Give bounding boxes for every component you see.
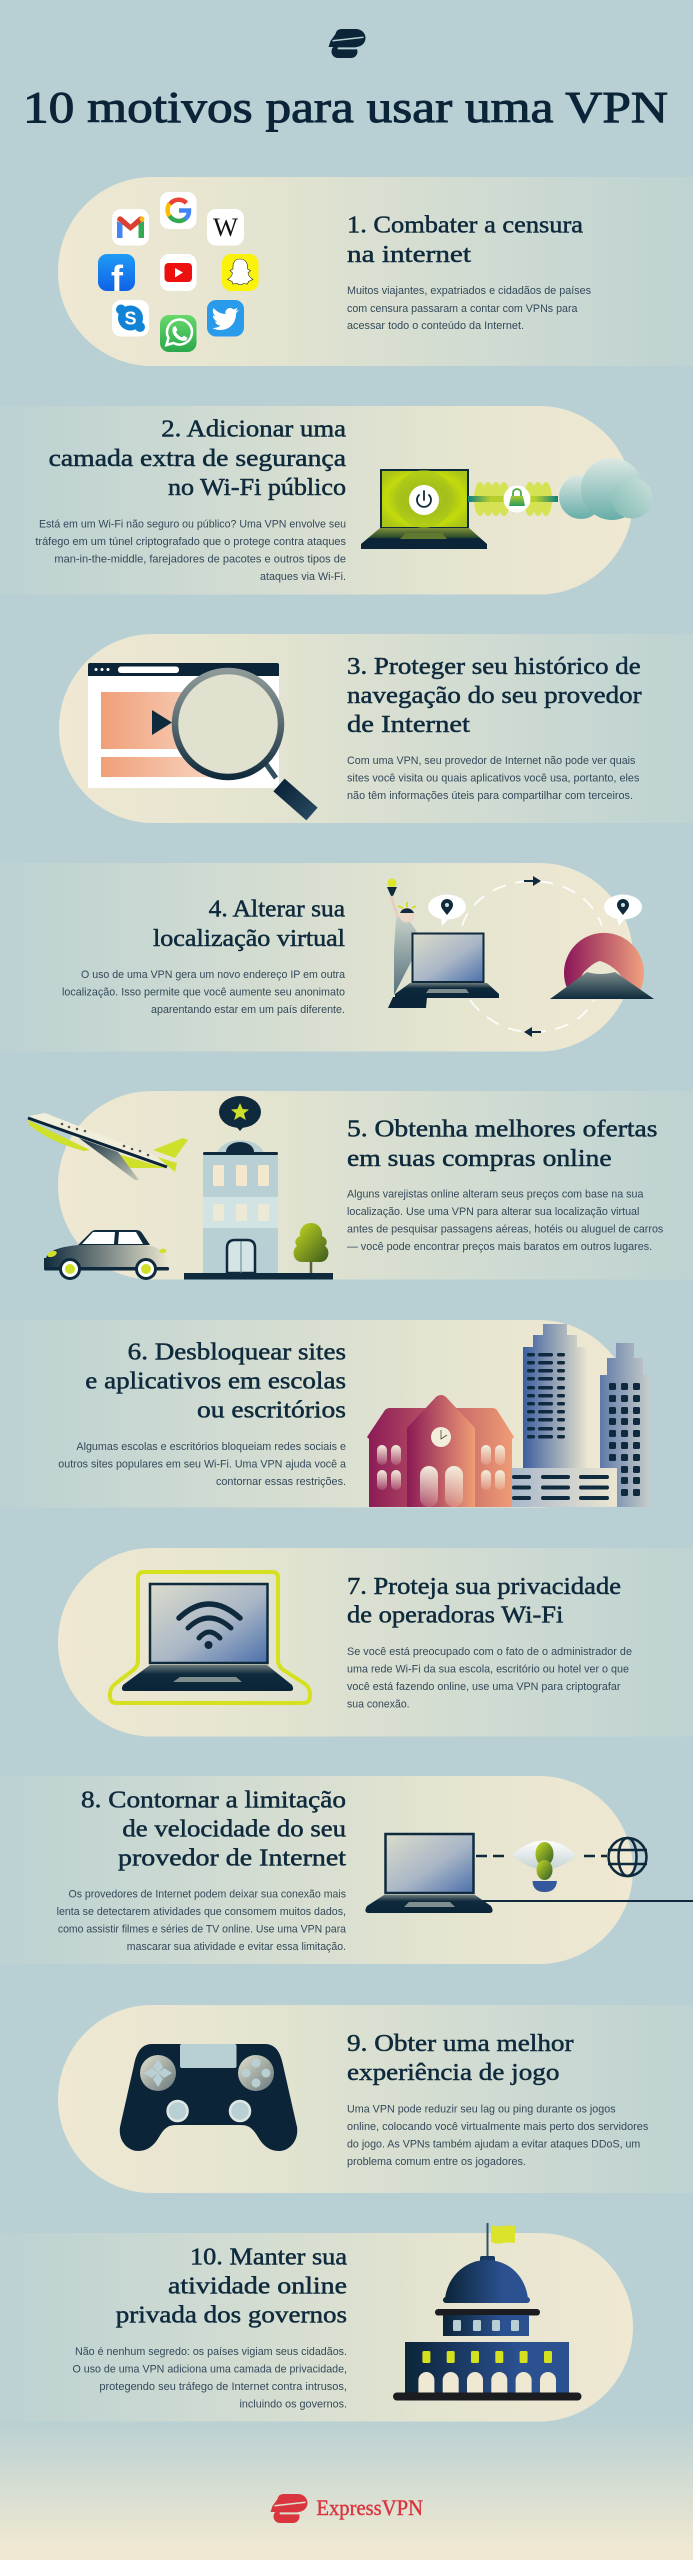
body text 7: você está fazendo online, use uma VPN para criptografar [347, 1681, 621, 1693]
body text 3: não têm informações úteis para compartilhar com terceiros. [347, 790, 633, 802]
body text 5 [347, 1189, 664, 1253]
footer logo [270, 2494, 423, 2523]
body text 10 [72, 2346, 347, 2410]
heading 3 [347, 654, 642, 738]
tunnel and lock [468, 482, 558, 516]
title: 10 motivos para usar uma VPN [23, 83, 668, 132]
wordmark: ExpressVPN [316, 2495, 423, 2520]
icon: Google [160, 192, 196, 229]
body text 6: outros sites populares em seu Wi-Fi. Uma VPN ajuda você a [58, 1458, 347, 1470]
heading 2: 2. Adicionar uma [161, 417, 346, 443]
body text 6 [58, 1441, 347, 1488]
body text 1: acessar todo o conteúdo da Internet. [347, 320, 524, 332]
heading 10: privada dos governos [116, 2303, 347, 2329]
body text 10: incluindo os governos. [240, 2398, 347, 2410]
body text 5: Alguns varejistas online alteram seus preços com base na sua [347, 1189, 644, 1201]
tower middle [523, 1324, 587, 1468]
heading 8: provedor de Internet [118, 1846, 346, 1872]
icon: Facebook: f [111, 258, 124, 299]
heading 1: na internet [347, 242, 471, 268]
body text 3: sites você visita ou quais aplicativos você usa, portanto, eles [347, 772, 640, 784]
panel 6: schools and offices [0, 1320, 649, 1508]
body text 9 [347, 2103, 649, 2168]
icon: YouTube [160, 254, 196, 291]
laptop [361, 470, 487, 549]
statue of liberty [387, 878, 427, 1008]
illustration: laptop with Wi-Fi symbol [110, 1572, 310, 1703]
low office block [512, 1468, 617, 1507]
school [367, 1395, 514, 1507]
tree [294, 1223, 328, 1273]
body text 2: ataques via Wi-Fi. [260, 571, 346, 583]
magnifier [175, 671, 312, 814]
plane [28, 1113, 188, 1180]
body text 8: como assistir filmes e séries de TV online. Use uma VPN para [58, 1924, 347, 1936]
body text 8: mascarar sua atividade e evitar essa limitação. [127, 1941, 346, 1953]
heading 8 [81, 1787, 346, 1872]
panel 2: public Wi-Fi [0, 406, 652, 594]
dome [443, 2256, 530, 2303]
heading 5 [347, 1117, 658, 1172]
body text 7: Se você está preocupado com o fato de o administrador de [347, 1646, 632, 1658]
heading 2: no Wi-Fi público [168, 475, 346, 501]
panel 10: governments [0, 2223, 633, 2422]
body text 2: Está em um Wi-Fi não seguro ou público? Uma VPN envolve seu [39, 519, 346, 531]
heading 6: e aplicativos em escolas [85, 1369, 346, 1395]
browser window [88, 663, 279, 788]
icon: Twitter [207, 300, 244, 336]
body text 5: — você pode encontrar preços mais baratos em outros lugares. [347, 1241, 652, 1253]
laptop [395, 934, 499, 998]
star bubble [219, 1096, 261, 1131]
car [44, 1230, 169, 1278]
heading 10: 10. Manter sua [190, 2244, 347, 2270]
Wi-Fi symbol [179, 1604, 240, 1647]
heading 1 [347, 213, 583, 268]
cable line [482, 1900, 693, 1902]
heading 6: ou escritórios [197, 1398, 346, 1424]
dashes [476, 1855, 607, 1857]
body text 9: online, colocando você virtualmente mais perto dos servidores [347, 2121, 649, 2133]
laptop [365, 1834, 493, 1913]
body text 4: aparentando estar em um país diferente. [151, 1004, 345, 1016]
globe [608, 1838, 647, 1876]
heading 6: 6. Desbloquear sites [128, 1339, 346, 1365]
body text 5: localização. Use uma VPN para alterar sua localização virtual [347, 1206, 639, 1218]
heading 2 [49, 417, 346, 501]
d-pad [140, 2055, 176, 2091]
illustration: laptop, eye and globe [365, 1834, 693, 1913]
icon: Facebook [98, 254, 135, 299]
body text 5: antes de pesquisar passagens aéreas, hotéis ou aluguel de carros [347, 1224, 664, 1236]
heading 4: 4. Alterar sua [209, 897, 345, 923]
body text 10: protegendo seu tráfego de Internet contra intrusos, [99, 2381, 347, 2393]
body text 1: Muitos viajantes, expatriados e cidadãos de países [347, 285, 591, 297]
heading 9 [347, 2031, 574, 2086]
body text 2 [35, 519, 346, 583]
body text 1: com censura passaram a contar com VPNs para [347, 303, 578, 315]
base [393, 2392, 582, 2400]
heading 8: 8. Contornar a limitação [81, 1787, 346, 1813]
body text 4 [62, 969, 346, 1016]
icon: Skype [112, 300, 149, 336]
body text 7: sua conexão. [347, 1698, 410, 1710]
icon: Skype: S [124, 308, 137, 328]
panel 3: browsing history [59, 634, 693, 823]
body text 8: Os provedores de Internet podem deixar sua conexão mais [68, 1889, 346, 1901]
drum [435, 2309, 540, 2336]
heading 7: de operadoras Wi-Fi [347, 1603, 564, 1629]
dashed route [462, 881, 602, 1032]
body text 3 [347, 755, 640, 802]
illustration: game controller [120, 2044, 297, 2151]
heading 4: localização virtual [153, 926, 345, 952]
body text 7 [347, 1646, 632, 1710]
lime outline [110, 1572, 310, 1703]
heading 4 [153, 897, 345, 952]
buttons [238, 2055, 274, 2091]
heading 9: experiência de jogo [347, 2060, 559, 2086]
body text 8 [57, 1889, 347, 1953]
ground [184, 1273, 333, 1280]
laptop [122, 1584, 293, 1691]
body text 9: do jogo. As VPNs também ajudam a evitar ataques DDoS, um [347, 2138, 640, 2150]
heading 7 [347, 1574, 621, 1629]
body text 1 [347, 285, 591, 332]
location pin bubble 2 [604, 894, 642, 926]
icon: WhatsApp [160, 315, 196, 352]
illustration: laptop connected to cloud through VPN tunnel [361, 458, 652, 549]
illustration: plane, car and hotel [28, 1096, 333, 1280]
illustration: capitol building [393, 2223, 582, 2400]
heading 3: de Internet [347, 712, 470, 738]
panel 9: gaming [58, 2005, 693, 2193]
body text 9: problema comum entre os jogadores. [347, 2156, 526, 2168]
tower right [600, 1343, 649, 1507]
icon: Gmail [112, 209, 149, 246]
heading 5: em suas compras online [347, 1146, 612, 1172]
icon: Wikipedia [207, 209, 244, 246]
body text 6: contornar essas restrições. [216, 1476, 346, 1488]
panel 8: throttling [0, 1776, 693, 1964]
panel 5: shopping deals [28, 1091, 693, 1280]
body text 6: Algumas escolas e escritórios bloqueiam redes sociais e [76, 1441, 346, 1453]
body text 10: Não é nenhum segredo: os países vigiam seus cidadãos. [75, 2346, 347, 2358]
body text 2: man-in-the-middle, farejadores de pacotes e outros tipos de [54, 554, 346, 566]
icon group: app icons [98, 192, 258, 352]
heading 9: 9. Obter uma melhor [347, 2031, 574, 2057]
logo: ExpressVPN mark top [328, 29, 366, 58]
illustration: school and skyscrapers [367, 1324, 649, 1507]
heading 6 [85, 1339, 346, 1424]
mountain and sun [550, 933, 654, 999]
touchpad [180, 2044, 236, 2068]
heading 2: camada extra de segurança [49, 446, 346, 472]
heading 10 [116, 2244, 347, 2329]
heading 3: navegação do seu provedor [347, 683, 642, 709]
hotel building [203, 1140, 278, 1273]
illustration: location change [387, 876, 654, 1037]
right stick [230, 2101, 250, 2121]
icon: Wikipedia: W [213, 213, 238, 242]
body text 4: localização. Isso permite que você aumente seu anonimato [62, 986, 345, 998]
lower building [405, 2342, 569, 2393]
icon: Snapchat [222, 254, 258, 291]
body text 8: lenta se detectarem atividades que consomem muitos dados, [57, 1906, 346, 1918]
eye with plant [512, 1840, 577, 1892]
heading 5: 5. Obtenha melhores ofertas [347, 1117, 658, 1143]
left stick [168, 2101, 188, 2121]
heading 1: 1. Combater a censura [347, 213, 583, 239]
body text 9: Uma VPN pode reduzir seu lag ou ping durante os jogos [347, 2103, 616, 2115]
cloud [559, 458, 652, 520]
body text 4: O uso de uma VPN gera um novo endereço IP em outra [81, 969, 346, 981]
body text 10: O uso de uma VPN adiciona uma camada de privacidade, [72, 2364, 347, 2376]
panel 7: Wi-Fi operators [58, 1548, 693, 1736]
flag and pole [488, 2223, 515, 2256]
panel 4: virtual location [0, 863, 654, 1052]
body text 7: uma rede Wi-Fi da sua escola, escritório ou hotel ver o que [347, 1664, 629, 1676]
heading 3: 3. Proteger seu histórico de [347, 654, 641, 680]
arrow right [524, 876, 541, 886]
body text 3: Com uma VPN, seu provedor de Internet não pode ver quais [347, 755, 636, 767]
body text 2: tráfego em um túnel criptografado que o protege contra ataques [35, 536, 346, 548]
heading 10: atividade online [168, 2273, 347, 2299]
panel 1: censorship [58, 177, 693, 366]
heading 7: 7. Proteja sua privacidade [347, 1574, 621, 1600]
arrow left [524, 1027, 541, 1037]
location pin bubble 1 [428, 894, 466, 926]
logo: ExpressVPN mark red [270, 2494, 308, 2523]
illustration: browser and magnifier [88, 663, 312, 814]
heading 8: de velocidade do seu [122, 1817, 346, 1843]
